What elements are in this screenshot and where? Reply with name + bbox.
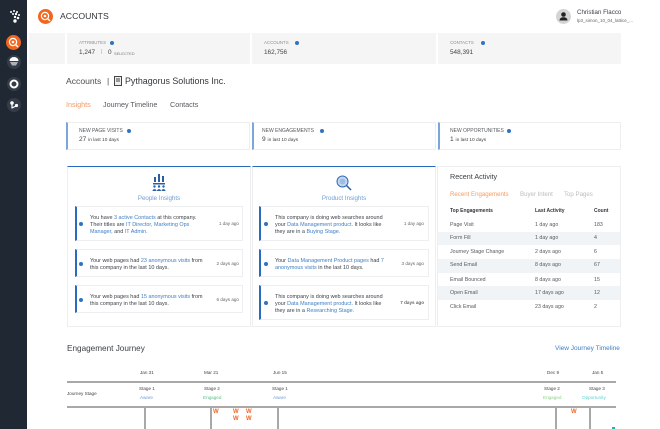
row: form fill [438,232,620,245]
icon: people [152,174,166,191]
row: journey stage change [450,249,597,255]
date labels: Jun 15 [273,370,287,374]
info icon [320,128,324,132]
value: 9 in last 10 days [262,136,298,143]
panel: product insights [252,166,436,327]
insight 2 [259,249,429,277]
message: Manager, and IT Admin. [90,228,148,234]
message: anonymous visits in the last 10 days. [275,264,364,270]
breadcrumb separator: | [107,76,109,86]
stage 1: Aware [140,394,153,400]
row: form fill: Form Fill [450,235,471,241]
row: send email [438,259,620,273]
tab: journey timeline: Journey Timeline [103,100,157,109]
user name: Christian Flacco [577,9,621,16]
message: Your web pages had 15 anonymous visits from [90,294,203,300]
row: send email: 8 days ago [535,262,561,268]
row: open email: Open Email [450,290,478,296]
insight 2 [75,249,243,277]
time: 1 day ago [219,221,239,226]
contacts label: CONTACTS [450,40,474,45]
label: NEW ENGAGEMENTS [262,128,314,134]
row: form fill: 1 day ago [535,235,558,241]
table header [450,208,608,214]
stage 2: Stage 2 [204,386,220,391]
date labels: Jan 31 [140,370,154,374]
insight 1 [259,206,429,241]
row: open email: 17 days ago [535,290,564,296]
tab: recent engagements: Recent Engagements [450,191,509,198]
time: 3 days ago [402,261,424,266]
bullet [264,222,268,226]
message: You have 3 active Contacts at this company. [90,214,196,220]
row: form fill: 4 [594,235,597,241]
stage 3 [582,386,606,400]
engagement table [438,208,620,310]
row: email bounced [450,277,600,283]
company name: Pythagorus Solutions Inc. [125,76,226,86]
tab: top pages: Top Pages [564,191,593,198]
panel: recent activity [437,166,621,327]
panel: people insights [67,166,251,327]
info icon [127,128,131,132]
activity tabs [450,191,593,198]
bullet [79,222,83,226]
attributes value: SELECTED [114,50,135,56]
table header: Last Activity [535,208,565,214]
icon: logo [10,10,20,23]
message [275,294,383,314]
contacts value: 548,391 [450,49,473,56]
row: page visit: Page Visit [450,222,474,228]
info icon [110,41,114,45]
date labels: Dec 9 [547,370,559,374]
bullet [264,262,268,266]
bullet [79,298,83,302]
message [275,214,383,234]
label: NEW OPPORTUNITIES [450,128,504,134]
stage 2: Engaged [203,394,221,400]
stage 2: Engaged [543,394,561,400]
journey stage row [67,386,606,400]
stat panel: attributes [67,33,250,64]
tab: insights: Insights [66,100,91,109]
web visit markers: W [213,408,219,414]
date labels [140,370,603,374]
message: this company in the last 10 days. [90,264,169,270]
value: 27 in last 10 days [79,136,119,143]
row: open email: 12 [594,290,600,296]
message [275,258,384,270]
message: This company is doing web searches around [275,214,383,220]
row: click email: 2 [594,304,597,310]
icon: avatar [556,9,571,24]
time: 2 days ago [217,261,239,266]
message [90,214,196,234]
attributes value: 1,247 [79,49,95,56]
icon: playbooks [7,55,21,69]
accounts value: 162,756 [264,49,287,56]
table header: Top Engagements [450,208,493,214]
accounts label: ACCOUNTS [264,40,289,45]
heading: Recent Activity [450,172,497,181]
message: Their titles are IT Director, Marketing Ops [90,222,189,228]
info icon [481,41,485,45]
web visit marker: W [571,408,577,414]
info icon [507,128,511,132]
message [90,294,203,306]
tab: buyer intent: Buyer Intent [520,191,553,198]
time: 7 days ago [400,300,424,305]
gray strip left [29,33,65,64]
heading: Product Insights [322,195,366,202]
row label: Journey Stage [67,391,97,396]
stage 2 [203,386,222,400]
heading: engagement journey: Engagement Journey [67,344,145,353]
teal marker [612,427,615,429]
row: journey stage change: 6 [594,249,597,255]
title: ACCOUNTS [60,11,109,21]
message: this company in the last 10 days. [90,300,169,306]
web visit markers [213,408,252,422]
web visit markers: W [233,416,239,422]
row: click email [450,304,597,310]
stage 1 [139,386,155,400]
message: they are in a Researching Stage. [275,308,354,314]
stage 3: Opportunity [582,394,606,400]
icon: accounts active [6,35,21,50]
value: 1 in last 10 days [450,136,486,143]
stat panel: contacts [438,33,621,64]
row: page visit: 183 [594,222,603,228]
attributes value [79,49,135,56]
row: send email: Send Email [450,262,477,268]
insight 3 [75,285,243,313]
stage 1: Aware [273,394,286,400]
label: NEW PAGE VISITS [79,128,123,134]
stage 1: Stage 1 [272,386,288,391]
row: email bounced: Email Bounced [450,277,486,283]
metric: new engagements [252,122,436,150]
row: journey stage change: Journey Stage Change [450,249,504,255]
link: view journey timeline: View Journey Timeline [555,345,620,352]
row: journey stage change: 2 days ago [535,249,561,255]
table header: Count [594,208,608,214]
attributes value: 0 [108,49,112,56]
breadcrumb text: accounts: Accounts [66,76,101,86]
date labels: Jan 5 [592,370,603,374]
web visit markers: W [246,408,252,414]
stage 1: Stage 1 [139,386,155,391]
icon: magnifier [336,176,352,190]
message: Your Data Management Product pages had 7 [275,258,384,264]
breadcrumb [66,76,226,86]
row: send email: 67 [594,262,600,268]
message: your Data Management product. It looks like [275,222,381,228]
bullet [264,301,268,305]
message: This company is doing web searches around [275,294,383,300]
message: Your web pages had 23 anonymous visits from [90,258,203,264]
message [90,258,203,270]
icon: ring [7,77,21,91]
metric: new page visits [66,122,250,150]
row: page visit: 1 day ago [535,222,558,228]
row: email bounced: 8 days ago [535,277,561,283]
insight 1 [75,206,243,241]
info icon [295,41,299,45]
sidebar [0,0,27,429]
bullet [79,262,83,266]
date labels: Mar 21 [204,370,218,374]
icon: building [114,76,122,86]
row: page visit [450,222,603,228]
insight 3 [259,285,429,320]
message: your Data Management product. It looks like [275,300,381,306]
attributes value: | [101,49,102,55]
time: 6 days ago [217,297,239,302]
stage 3: Stage 3 [589,386,605,391]
row: email bounced: 15 [594,277,600,283]
stat panel: accounts [252,33,436,64]
icon: header accounts [38,9,53,24]
web visit markers: W [233,408,239,414]
time: 1 day ago [404,221,424,226]
row: open email [438,286,620,300]
tabs [66,100,198,109]
user profile [556,9,633,24]
heading: People Insights [138,195,180,202]
metric: new opportunities [438,122,621,150]
stage 1 [272,386,288,400]
attributes label: ATTRIBUTES [79,40,106,45]
web visit markers: W [246,416,252,422]
row: click email: Click Email [450,304,476,310]
tab: contacts: Contacts [170,100,198,109]
timeline chart [67,370,616,429]
user tenant: lp3_simon_10_04_lattice_... [577,18,633,22]
stage 2: Stage 2 [544,386,560,391]
row: click email: 23 days ago [535,304,564,310]
stage 2 [543,386,562,400]
message: they are in a Buying Stage. [275,228,340,234]
icon: connections [7,98,21,112]
